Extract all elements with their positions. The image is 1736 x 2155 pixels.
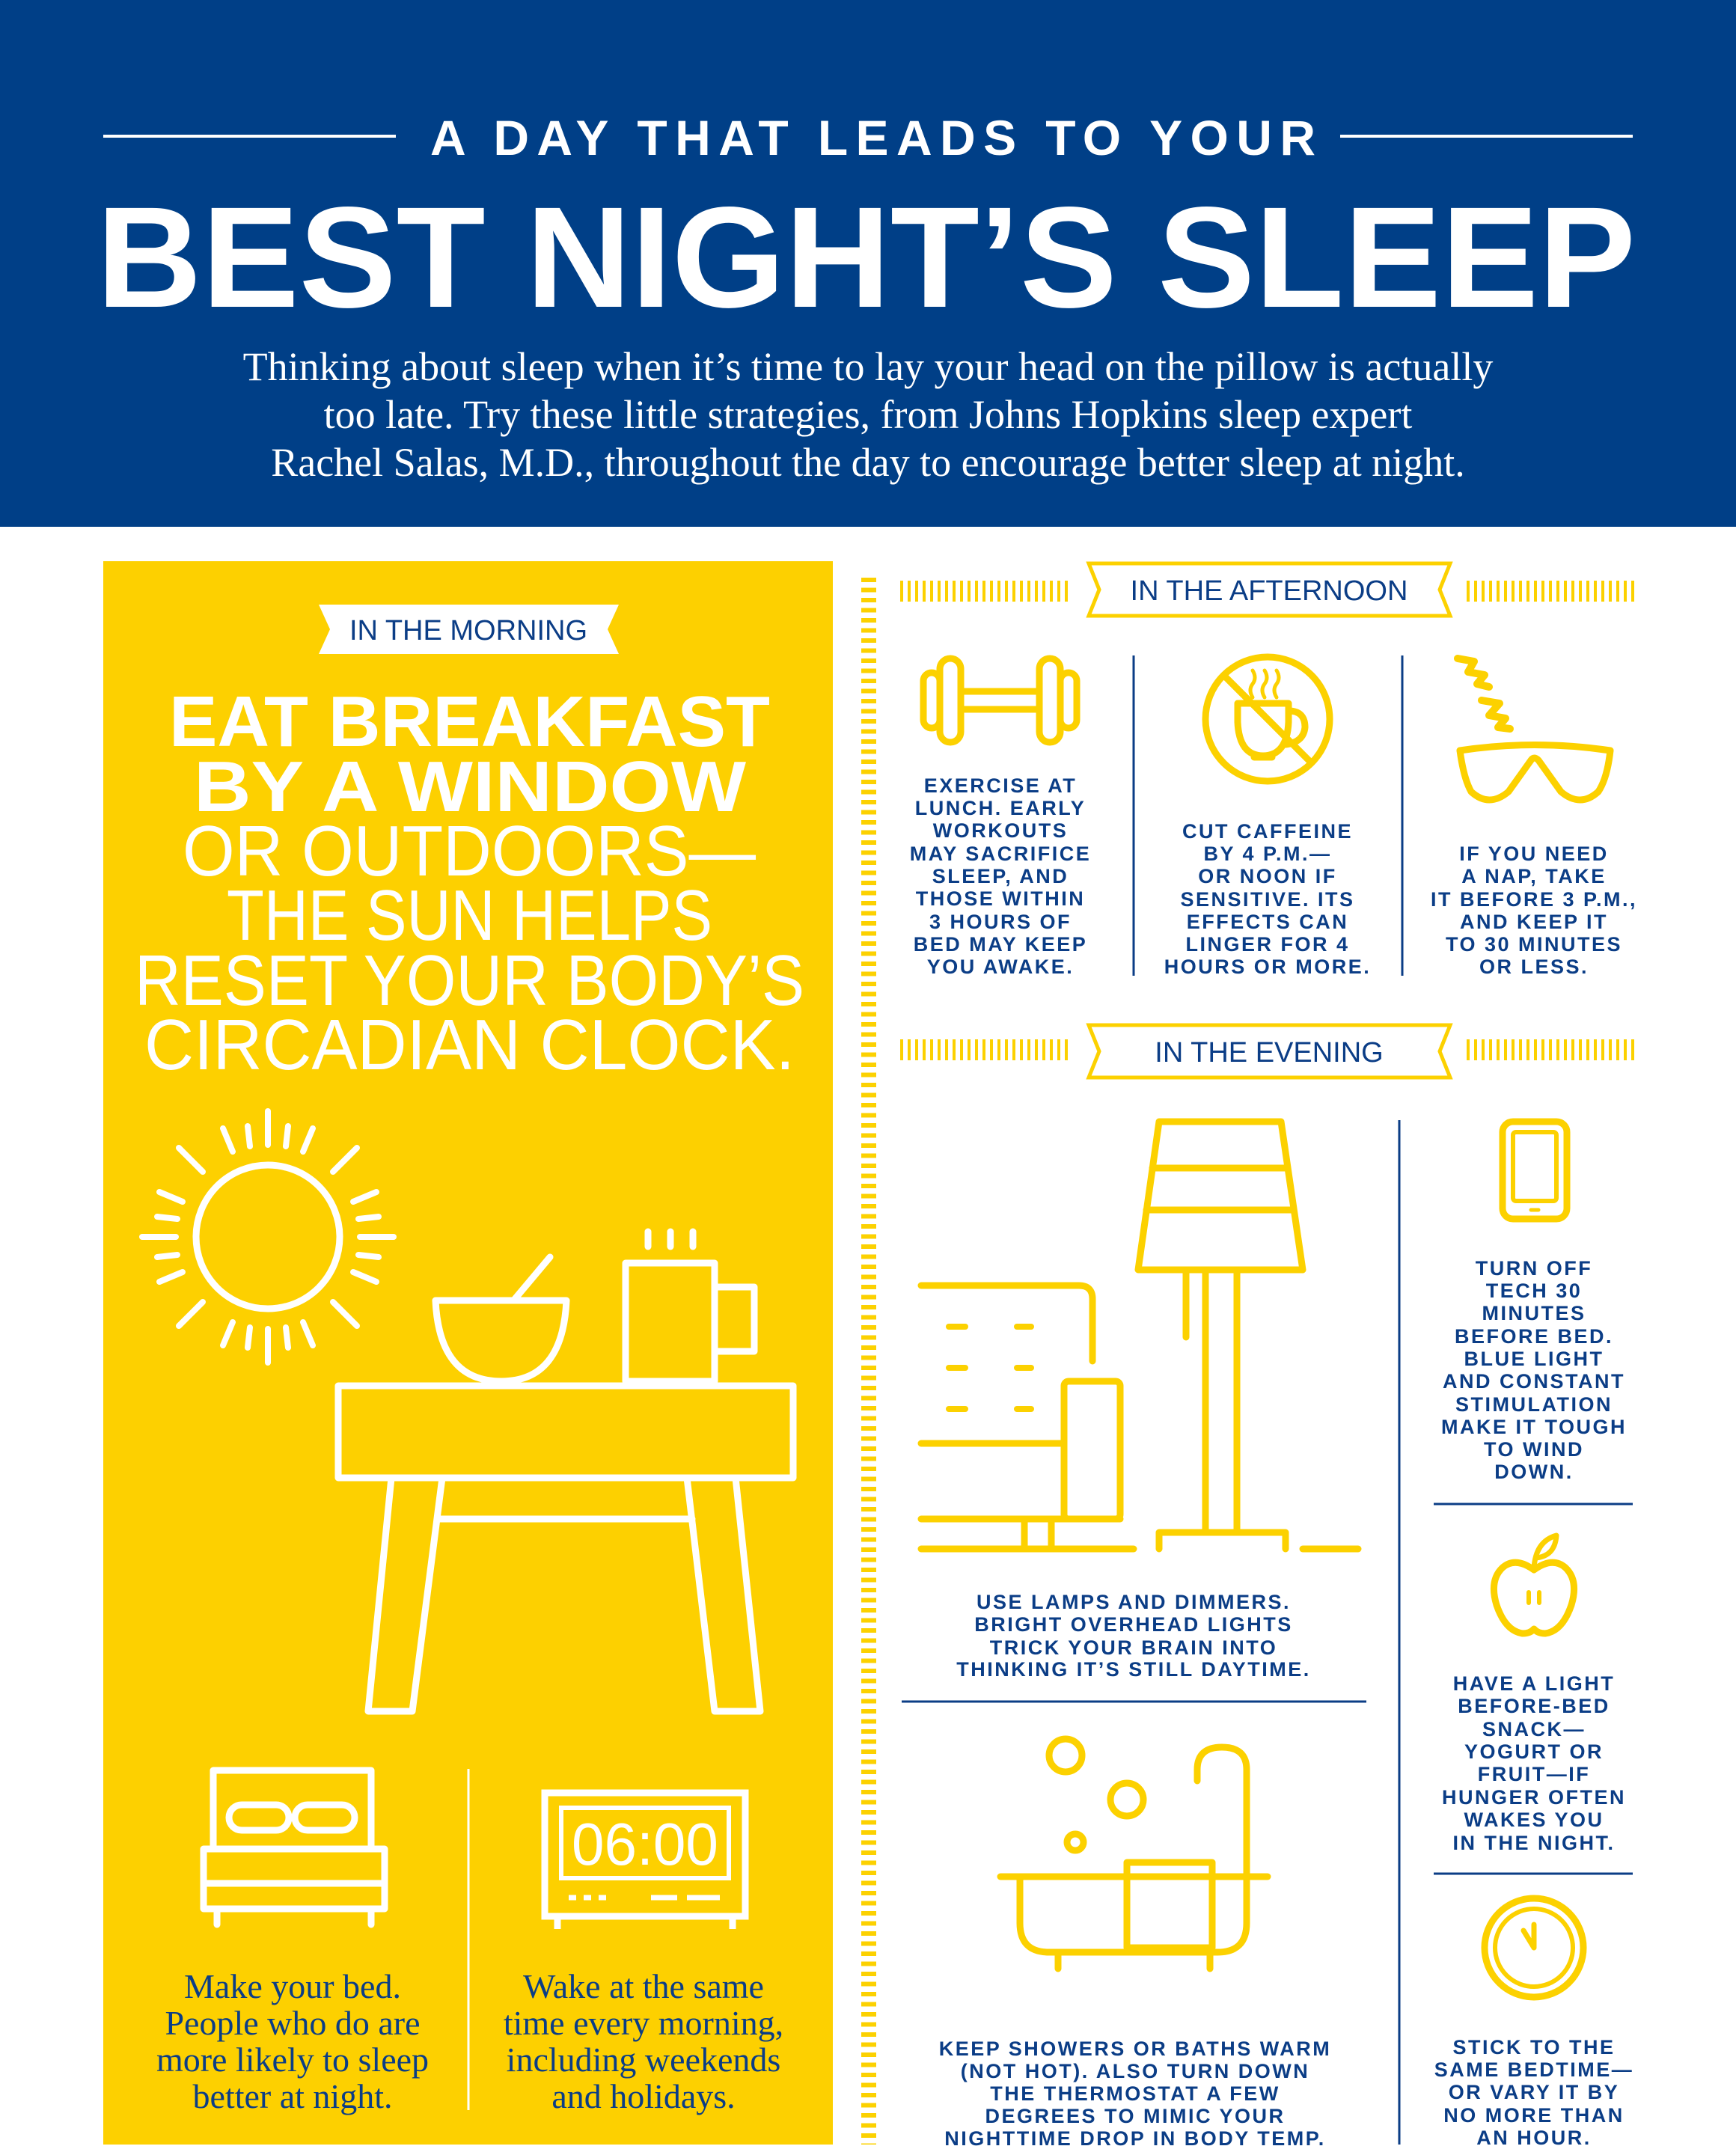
text: lamps: USE LAMPS AND DIMMERS. — [977, 1591, 1291, 1613]
icon: sleep mask — [1458, 658, 1610, 800]
text: bedtime: OR VARY IT BY — [1449, 2081, 1619, 2103]
text: bedtime: SAME BEDTIME— — [1434, 2058, 1633, 2081]
text: snack — [1442, 1672, 1626, 1854]
panel: morning — [103, 561, 833, 2145]
text: tech: AND CONSTANT — [1443, 1370, 1625, 1393]
text: caffeine: HOURS OR MORE. — [1164, 956, 1371, 978]
text: tech: TO WIND — [1484, 1438, 1584, 1461]
morning heading: EAT BREAKFAST — [169, 682, 770, 762]
text: caffeine: SENSITIVE. ITS — [1180, 888, 1355, 911]
evening dividers — [902, 1120, 1633, 2145]
caption: wake at same time: Wake at the same — [523, 1967, 764, 2005]
icon: bed — [204, 1770, 385, 1925]
ruler — [861, 578, 876, 2145]
text: snack: BEFORE-BED — [1458, 1695, 1610, 1717]
caption: make your bed: Make your bed. — [184, 1967, 401, 2005]
text: bedtime: AN HOUR. — [1476, 2127, 1592, 2149]
morning heading: RESET YOUR BODY’S — [135, 941, 804, 1021]
intro text — [243, 344, 1493, 485]
text: baths: KEEP SHOWERS OR BATHS WARM — [939, 2038, 1331, 2060]
morning heading: OR OUTDOORS— — [183, 811, 756, 891]
icon: sun — [142, 1111, 394, 1363]
text: tech: MINUTES — [1482, 1302, 1586, 1324]
icon: apple — [1494, 1535, 1574, 1633]
icon: mug — [626, 1232, 754, 1381]
icon: table — [338, 1386, 793, 1711]
text: exercise: EXERCISE AT — [924, 774, 1077, 797]
icon: alarm clock: 06:00 — [572, 1811, 718, 1877]
text: bedtime: NO MORE THAN — [1443, 2104, 1625, 2127]
text: caffeine: CUT CAFFEINE — [1182, 820, 1353, 843]
icon: bath — [1000, 1739, 1268, 1969]
text: lamps: BRIGHT OVERHEAD LIGHTS — [974, 1613, 1293, 1636]
text: caffeine: LINGER FOR 4 — [1185, 933, 1350, 956]
text: nap: AND KEEP IT — [1460, 911, 1608, 933]
icon: alarm clock — [545, 1793, 745, 1929]
divider — [467, 1769, 470, 2110]
text: snack: FRUIT—IF — [1478, 1763, 1590, 1785]
text: exercise: LUNCH. EARLY — [915, 797, 1086, 819]
text: tech: DOWN. — [1494, 1461, 1574, 1483]
text: exercise: THOSE WITHIN — [916, 887, 1085, 910]
banner: afternoon — [900, 563, 1634, 616]
text: lamps — [956, 1591, 1311, 1681]
text: baths — [939, 2038, 1331, 2150]
text: nap: TO 30 MINUTES — [1446, 933, 1622, 956]
text: nap — [1431, 843, 1637, 978]
kicker: A DAY THAT LEADS TO YOUR — [430, 110, 1315, 165]
text: caffeine — [1164, 820, 1371, 978]
icon: bowl — [435, 1257, 566, 1381]
header band — [0, 0, 1736, 527]
text: nap: IF YOU NEED — [1459, 843, 1609, 865]
text: tech: MAKE IT TOUGH — [1441, 1416, 1627, 1438]
text: exercise: SLEEP, AND — [932, 865, 1069, 887]
caption: wake at same time: time every morning, — [504, 2004, 783, 2042]
text: caffeine: OR NOON IF — [1198, 865, 1337, 887]
text: tech: TECH 30 — [1486, 1280, 1582, 1302]
morning heading: CIRCADIAN CLOCK. — [144, 1005, 795, 1085]
afternoon dividers — [1134, 655, 1402, 976]
banner: evening: IN THE EVENING — [1155, 1037, 1384, 1069]
text: tech: TURN OFF — [1476, 1257, 1592, 1280]
caption: make your bed: more likely to sleep — [156, 2041, 429, 2079]
banner: afternoon: IN THE AFTERNOON — [1131, 575, 1408, 607]
text: baths: DEGREES TO MIMIC YOUR — [985, 2105, 1286, 2127]
text: baths: (NOT HOT). ALSO TURN DOWN — [961, 2060, 1309, 2082]
text: bedtime — [1434, 2036, 1633, 2149]
text: baths: NIGHTTIME DROP IN BODY TEMP. — [944, 2127, 1326, 2150]
icon: phone — [1503, 1122, 1567, 1219]
banner: in the morning — [319, 605, 619, 654]
banner: in the morning: IN THE MORNING — [349, 615, 587, 646]
caption: wake at same time — [504, 1967, 783, 2115]
text: snack: YOGURT OR — [1464, 1740, 1604, 1763]
caption: make your bed: People who do are — [165, 2004, 421, 2042]
text: snack: HAVE A LIGHT — [1453, 1672, 1615, 1695]
caption: wake at same time: including weekends — [507, 2041, 780, 2079]
icon: clock — [1485, 1898, 1583, 1997]
text: baths: THE THERMOSTAT A FEW — [990, 2082, 1280, 2105]
morning heading — [135, 682, 804, 1085]
text: tech: BEFORE BED. — [1455, 1325, 1613, 1348]
title: BEST NIGHT’S SLEEP — [97, 177, 1636, 337]
icon: dumbbell — [923, 658, 1077, 742]
text: caffeine: EFFECTS CAN — [1187, 911, 1348, 933]
morning heading: BY A WINDOW — [194, 747, 746, 827]
caption: wake at same time: and holidays. — [551, 2077, 736, 2115]
text: tech: STIMULATION — [1455, 1393, 1613, 1416]
banner: evening — [900, 1025, 1634, 1078]
text: tech: BLUE LIGHT — [1464, 1348, 1604, 1370]
intro text: too late. Try these little strategies, from Johns Hopkins sleep expert — [324, 392, 1412, 437]
text: nap: A NAP, TAKE — [1461, 865, 1607, 887]
text: exercise: YOU AWAKE. — [927, 956, 1074, 978]
text: exercise: MAY SACRIFICE — [910, 843, 1091, 865]
text: tech — [1441, 1257, 1627, 1483]
text: snack: SNACK— — [1482, 1718, 1586, 1740]
caption: make your bed: better at night. — [193, 2077, 392, 2115]
text: exercise — [910, 774, 1091, 978]
text: exercise: BED MAY KEEP — [914, 933, 1087, 956]
text: snack: HUNGER OFTEN — [1442, 1786, 1626, 1809]
caption: make your bed — [156, 1967, 429, 2115]
intro text: Rachel Salas, M.D., throughout the day to encourage better sleep at night. — [271, 440, 1465, 485]
text: caffeine: BY 4 P.M.— — [1203, 843, 1332, 865]
text: lamps: THINKING IT’S STILL DAYTIME. — [956, 1658, 1311, 1681]
text: nap: IT BEFORE 3 P.M., — [1431, 888, 1637, 911]
text: exercise: 3 HOURS OF — [929, 911, 1072, 933]
morning heading: THE SUN HELPS — [227, 875, 712, 956]
intro text: Thinking about sleep when it’s time to lay your head on the pillow is actually — [243, 344, 1493, 389]
text: bedtime: STICK TO THE — [1452, 2036, 1616, 2058]
text: lamps: TRICK YOUR BRAIN INTO — [990, 1636, 1277, 1659]
text: exercise: WORKOUTS — [933, 819, 1068, 842]
text: snack: IN THE NIGHT. — [1452, 1832, 1616, 1854]
text: nap: OR LESS. — [1479, 956, 1589, 978]
icon: lamp and sofa — [921, 1122, 1358, 1549]
icon: no coffee — [1205, 657, 1330, 781]
text: snack: WAKES YOU — [1464, 1809, 1604, 1831]
